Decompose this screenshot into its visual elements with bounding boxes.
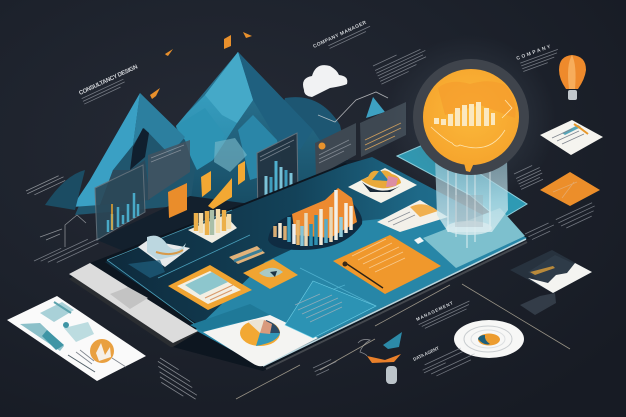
dark screen [105,157,527,366]
text block: top centre [373,43,430,84]
teal chart blocks [20,302,94,351]
glass corner [423,208,525,268]
floating orange shards [150,32,252,99]
text block: bottom centre [412,333,476,382]
right mountain [176,52,340,220]
text panel on teal [285,281,376,338]
small cylinder icon [386,366,397,384]
light globe on glass tower [386,35,556,248]
isometric gold bars card [188,209,237,243]
chart fragment icon [358,332,402,363]
curved sculpture card [128,236,190,278]
left mountain [45,93,195,215]
text block: lower right [525,202,598,245]
pie chart card [348,168,417,203]
white donut dial [454,320,524,358]
tablet body [69,163,530,371]
dark base behind panels [97,160,372,262]
text block: bottom centre: DATA AGENT [412,345,440,362]
orange donut [90,339,114,363]
globe [423,69,519,172]
text block: under tablet centre: MANAGEMENT [415,300,454,322]
screen rule lines [107,210,376,325]
orange note card [540,172,600,206]
stacked books icon [229,246,265,264]
connector lines [236,284,570,399]
medium teal screen area [195,215,527,366]
small chart sketch [40,215,86,247]
tablet [69,157,530,371]
heading: top middle: COMPANY MANAGER [312,20,368,50]
white pie panel [203,315,318,366]
chart platform: city [268,188,362,250]
text block: top right [516,42,561,72]
light edge [263,239,526,366]
cloud [303,65,347,97]
mountain-side chart panel [95,165,145,240]
bar chart panel [257,133,298,220]
text block: bottom small [313,358,338,375]
white side bar [69,263,198,347]
orange framed document [168,265,252,310]
dark photo card [510,250,592,315]
line chart [318,92,388,122]
back hill [260,97,350,190]
text block: left middle [26,174,65,197]
text block: top right: COMPANY [516,44,552,62]
text block: bottom left [149,358,204,403]
mountains [45,52,350,220]
small glass label [414,237,424,244]
orange text panel [333,235,441,294]
teal map strip [190,304,272,332]
heading: consultancy design: CONSULTANCY DESIGN [78,64,139,97]
back glass panel [397,142,527,220]
orange photo card [243,259,298,289]
pie chart [240,319,280,346]
text block: under tablet centre [415,294,472,330]
white document card [377,200,448,232]
upper data panels [315,92,406,177]
orange cards [168,161,245,218]
glass tower [435,158,508,248]
text block: under left panel [34,232,100,271]
white data report card [7,296,146,381]
mountain-side text panel [148,140,190,200]
icon: light bulb [559,55,586,100]
white report card [540,120,603,155]
globe bars [434,102,495,126]
text block: right of tower [514,163,545,189]
